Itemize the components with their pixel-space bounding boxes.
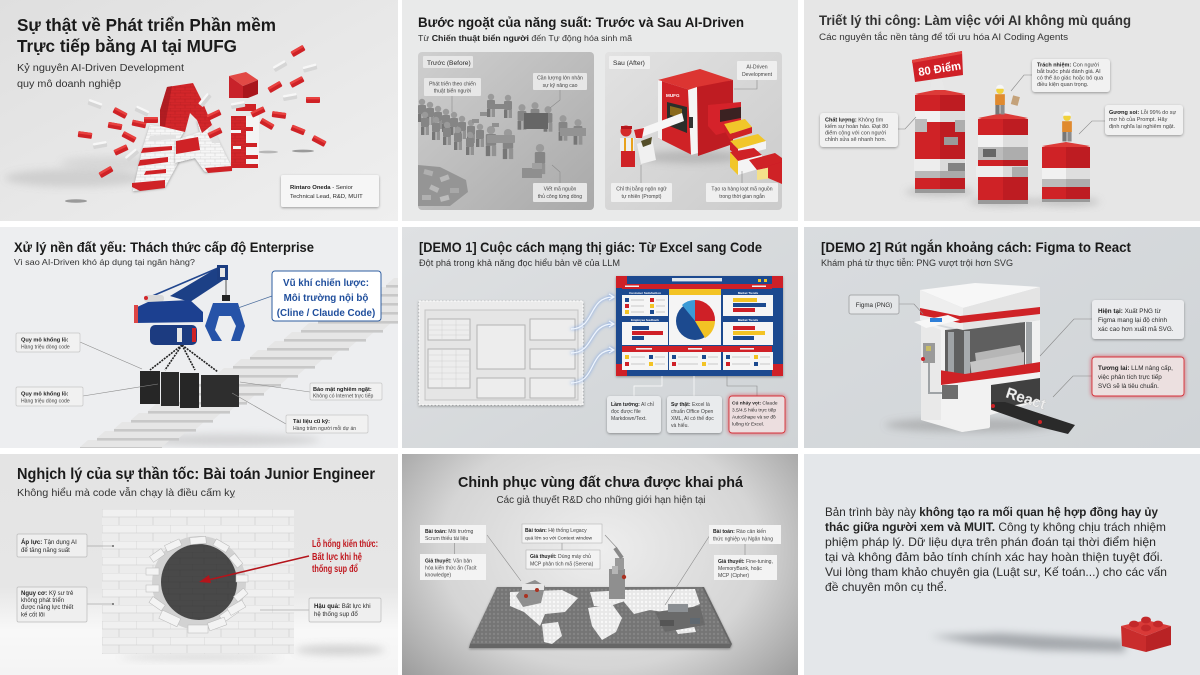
callout: future highlighted: SVG sẽ là tiêu chuẩn. xyxy=(1098,382,1159,390)
card: author credit: Rintaro Oneda - Senior xyxy=(290,185,353,191)
text block: disclaimer: phiệm pháp lý. Dữ liệu dựa trên phán đoán tại thời điểm hiện xyxy=(825,536,1156,549)
panel: demo 1 excel to code xyxy=(402,227,798,448)
callout: AI-Driven Development xyxy=(734,61,777,89)
callout group: scrum documentation: Bài toán: Môi trường xyxy=(425,529,474,535)
callout: risk: kế cốt lõi xyxy=(21,612,45,618)
callout: myth: Markdown/Text. xyxy=(611,416,647,422)
text block: disclaimer: Bản trình bày này không tạo ra mối quan hệ hợp đồng hay ủy xyxy=(825,506,1159,519)
callout: future highlighted: việc phân tích trực tiếp xyxy=(1098,372,1162,381)
callout: knowledge gap xyxy=(312,537,378,575)
illustration: red code machine with prompt operator xyxy=(620,69,782,184)
callout: truth: và hiểu. xyxy=(671,422,689,429)
callout: quality xyxy=(820,113,916,147)
text block: subtitle: Từ Chiến thuật biển người đến Tự động hóa sinh mã xyxy=(418,33,632,43)
illustration: generated dashboard: Market Trends xyxy=(738,318,759,322)
text block: subtitle: Kỷ nguyên AI-Driven Development xyxy=(17,62,184,74)
illustration: white brick press machine xyxy=(885,283,1075,434)
callout: truth: chuẩn Office Open xyxy=(671,408,714,415)
callout: human wave tactic xyxy=(424,78,481,112)
illustration: grey minifigure crowd and loose bricks xyxy=(418,94,586,206)
callout: myth xyxy=(607,376,662,433)
callout: consequence: hệ thống sụp đổ xyxy=(314,611,358,618)
callout: manual coding xyxy=(533,165,587,202)
callout: quality: điểm cộng với con người xyxy=(825,130,886,136)
text block: disclaimer xyxy=(825,506,1167,594)
callout: many low skilled people xyxy=(533,73,587,108)
callout: figma png xyxy=(849,295,923,314)
text block: disclaimer: đề chuyên môn cụ thể. xyxy=(825,581,947,594)
illustration: single red brick with shadow xyxy=(930,617,1171,652)
callout: responsibility xyxy=(1011,59,1110,92)
illustration: generated dashboard: Customer Satisfaction xyxy=(629,291,661,295)
text block: subtitle: quy mô doanh nghiệp xyxy=(17,78,121,90)
text block: subtitle: Khám phá từ thực tiễn: PNG vượt trội hơn SVG xyxy=(821,258,1013,268)
callout: old documentation xyxy=(232,393,368,433)
callout: risk xyxy=(17,587,114,622)
callout: myth: Lầm tưởng: AI chỉ xyxy=(611,401,655,408)
callout group: banking domain knowledge: thức nghiệp vụ Ngân hàng xyxy=(713,536,773,542)
callout: human wave tactic: thuật biển người xyxy=(434,88,471,94)
callout: quantum leap highlighted: AutoShape và sơ đồ xyxy=(732,414,776,420)
callout group: legacy system: Giả thuyết: Dùng máy chủ xyxy=(530,553,591,560)
illustration: tower one with 80 point sign xyxy=(905,74,975,196)
callout: old documentation: Hàng trăm người mỗi dự án xyxy=(293,425,356,432)
callout: manual coding: thủ công từng dòng xyxy=(538,193,582,200)
callout group: scrum documentation: Scrum thiếu tài liệu xyxy=(425,536,468,542)
illustration: tower two with reviewer figure xyxy=(969,85,1037,206)
illustration: white brick wall with hole xyxy=(102,509,385,660)
label: after: Sau (After) xyxy=(613,60,645,67)
callout group: banking domain knowledge: MCP (Cipher) xyxy=(718,573,749,579)
callout: massive scale upper: Quy mô khổng lồ: xyxy=(21,336,69,344)
callout: strict security: Bảo mật nghiêm ngặt: xyxy=(313,387,372,393)
callout group: banking domain knowledge: Giả thuyết: Fine-tuning, xyxy=(718,558,773,565)
callout: mass code output xyxy=(706,171,778,202)
callout: figma png: Figma (PNG) xyxy=(856,302,892,309)
callout group: banking domain knowledge: MemoryBank, hoặc xyxy=(718,566,762,572)
arrow: to knowledge gap xyxy=(199,556,309,583)
callout: mass code output: Tạo ra hàng loạt mã nguồn xyxy=(711,186,773,192)
panel: conquering unexplored land xyxy=(402,454,798,675)
callout: responsibility: điều kiện quan trọng. xyxy=(1037,82,1089,88)
callout: AI-Driven Development: AI-Driven xyxy=(746,64,768,70)
arrows: glowing links from sheet to dashboard xyxy=(571,294,614,383)
panel: before and after xyxy=(402,0,798,221)
callout: risk: không phát triển xyxy=(21,597,64,604)
callout: present xyxy=(1040,300,1184,356)
callout: AI-Driven Development: Development xyxy=(742,72,773,78)
heading: unexplored land: Chinh phục vùng đất chưa được khai phá xyxy=(458,474,744,491)
callout: knowledge gap: Bất lực khi hệ xyxy=(312,551,362,563)
callout: massive scale upper: Hàng triệu dòng code xyxy=(21,344,70,350)
callout: natural language prompt xyxy=(611,165,672,202)
illustration: brick world map with towers xyxy=(469,548,732,648)
label: before xyxy=(423,56,473,68)
callout: old documentation: Tài liệu cũ kỹ: xyxy=(293,419,330,425)
callout: present: xác cao hơn xuất mã SVG. xyxy=(1098,324,1174,333)
callout: manual coding: Viết mã nguồn xyxy=(544,186,577,192)
callout group: legacy system: Bài toán: Hệ thống Legacy xyxy=(525,528,587,534)
callout: responsibility: Trách nhiệm: Con người xyxy=(1037,62,1099,68)
text block: subtitle: Đột phá trong khả năng đọc hiểu bản vẽ của LLM xyxy=(419,258,620,268)
label: before: Trước (Before) xyxy=(427,60,471,67)
callout: many low skilled people: sự kỹ năng cao xyxy=(543,83,578,89)
panel: demo 2 figma to react xyxy=(804,227,1200,448)
panel: working philosophy xyxy=(804,0,1200,221)
card: author credit xyxy=(281,175,379,207)
illustration: generated dashboard: Market Trends xyxy=(738,291,759,295)
illustration: red code machine with prompt operator: MUFG xyxy=(666,93,680,98)
callout group: banking domain knowledge: Bài toán: Rào cản kiến xyxy=(713,529,766,535)
heading: construction philosophy: Triết lý thi công: Làm việc với AI không mù quáng xyxy=(819,13,1131,28)
callout group: scrum documentation: Giả thuyết: Văn bản xyxy=(425,558,472,564)
heading: slide title: Trực tiếp bằng AI tại MUFG xyxy=(17,35,237,56)
panel: legal disclaimer xyxy=(804,454,1200,675)
callout: pressure: Áp lực: Tận dụng AI xyxy=(21,539,77,546)
callout: consequence: Hậu quả: Bất lực khi xyxy=(314,603,371,610)
callout: massive scale lower: Quy mô khổng lồ: xyxy=(21,390,69,398)
callout: mirror: Gương soi: Lỗi 99% do sự xyxy=(1109,109,1177,116)
heading: soft ground: Xử lý nền đất yếu: Thách thức cấp độ Enterprise xyxy=(14,239,314,255)
illustration: white brick staircase xyxy=(80,278,476,450)
heading: slide title xyxy=(17,15,276,56)
illustration: generated dashboard: Employee feedback xyxy=(631,318,659,322)
text block: subtitle: Không hiểu mà code vẫn chạy là điều cấm kỵ xyxy=(17,486,236,499)
callout: natural language prompt: tự nhiên (Prompt) xyxy=(622,194,662,200)
callout group: legacy system: MCP phân tích mã (Serena) xyxy=(530,562,594,568)
card: author credit: Technical Lead, R&D, MUIT xyxy=(290,194,363,200)
illustration: brick AI letters with flying bricks xyxy=(5,45,327,203)
heading: visual revolution: [DEMO 1] Cuộc cách mạng thị giác: Từ Excel sang Code xyxy=(419,239,762,255)
callout: responsibility: bắt buộc phải đánh giá. AI xyxy=(1037,68,1101,75)
text block: subtitle xyxy=(17,62,184,90)
callout: myth: đọc được file xyxy=(611,409,641,415)
callout: pressure: để tăng năng suất xyxy=(21,547,70,554)
callout: massive scale lower xyxy=(16,384,158,406)
callout: quality: kiếm sự hoàn hảo. Đạt 80 xyxy=(825,124,888,130)
callout: knowledge gap: thống sụp đổ xyxy=(312,563,358,575)
callout: present: Figma mang lại độ chính xyxy=(1098,317,1167,324)
callout: human wave tactic: Phát triển theo chiến xyxy=(429,80,476,88)
callout: future highlighted: Tương lai: LLM nâng cấp, xyxy=(1098,363,1173,372)
callout: truth xyxy=(667,376,722,433)
callout: truth: Sự thật: Excel là xyxy=(671,402,710,408)
text block: disclaimer: thác giữa người xem và MUIT. Công ty không chịu trách nhiệm xyxy=(825,521,1166,534)
callout: strategic weapon: Vũ khí chiến lược: xyxy=(283,278,369,289)
callout group: banking domain knowledge xyxy=(665,525,781,605)
illustration: white brick press machine: React xyxy=(1004,385,1048,413)
sign: 80 Điểm: 80 Điểm xyxy=(918,60,962,79)
callout: present: Hiện tại: Xuất PNG từ xyxy=(1098,306,1161,315)
callout: many low skilled people: Cần lượng lớn nhân xyxy=(537,76,583,82)
callout group: scrum documentation: hóa kiến thức ẩn (Tacit xyxy=(425,564,477,572)
callout: quantum leap highlighted: luồng từ Excel. xyxy=(732,422,764,428)
panel: enterprise challenge xyxy=(0,227,398,448)
callout: consequence xyxy=(260,598,381,622)
callout: mass code output: trong thời gian ngắn xyxy=(719,193,765,200)
callout: massive scale upper xyxy=(16,333,142,369)
callout: quantum leap highlighted: Cú nhảy vọt: Claude xyxy=(732,400,778,406)
panel: junior engineer paradox xyxy=(0,454,398,675)
label: after xyxy=(609,56,650,69)
callout: natural language prompt: Chỉ thị bằng ngôn ngữ xyxy=(616,186,667,192)
illustration: tower three with figure xyxy=(1032,112,1100,206)
panel: title slide xyxy=(0,0,398,221)
panel: after xyxy=(605,52,782,210)
callout: quantum leap highlighted: 3.5/4.5 hiểu trực tiếp xyxy=(732,406,776,414)
callout: responsibility: có thể ảo giác hoặc bỏ qua xyxy=(1037,74,1104,82)
callout: quality: Chất lượng: Không tìm xyxy=(825,116,884,124)
callout: strategic weapon: Môi trường nội bộ xyxy=(284,293,368,304)
heading: turning point of productivity: Bước ngoặt của năng suất: Trước và Sau AI-Driven xyxy=(418,14,744,30)
sign: 80 Điểm xyxy=(912,51,963,82)
text block: subtitle: Vì sao AI-Driven khó áp dụng tại ngân hàng? xyxy=(14,257,195,267)
callout: quantum leap highlighted xyxy=(727,376,785,433)
text block: subtitle: Các giả thuyết R&D cho những giới hạn hiện tại xyxy=(496,494,706,506)
text block: disclaimer: Vui lòng tham khảo chuyên gia (Luật sư, Kế toán...) cho các vấn xyxy=(825,566,1167,579)
heading: figma to react: [DEMO 2] Rút ngắn khoảng cách: Figma to React xyxy=(821,238,1131,255)
callout: risk: được năng lực thiết xyxy=(21,605,74,611)
illustration: blue brick crane lifting black blocks xyxy=(134,265,245,408)
callout: mirror: mơ hồ của Prompt. Hãy xyxy=(1109,116,1168,123)
illustration: generated dashboard xyxy=(616,276,783,376)
text block: subtitle: Các nguyên tắc nền tảng để tối ưu hóa AI Coding Agents xyxy=(819,32,1068,42)
callout: massive scale lower: Hàng triệu dòng code xyxy=(21,398,70,404)
callout group: legacy system xyxy=(522,524,617,569)
callout: strategic weapon xyxy=(238,271,381,321)
heading: slide title: Sự thật về Phát triển Phần mềm xyxy=(17,15,276,35)
callout group: legacy system: quá lớn so với Context window xyxy=(525,536,593,542)
text block: disclaimer: tại và không đảm bảo tính chính xác hay hoàn thiện tuyệt đối. xyxy=(825,551,1163,564)
callout: future highlighted xyxy=(1053,357,1184,397)
callout: mirror: định nghĩa lại nghiêm ngặt. xyxy=(1109,124,1176,130)
heading: speed paradox: Nghịch lý của sự thần tốc: Bài toán Junior Engineer xyxy=(17,466,375,483)
callout group: scrum documentation xyxy=(420,525,521,581)
callout: risk: Nguy cơ: Kỹ sư trẻ xyxy=(21,591,74,597)
callout: strategic weapon: (Cline / Claude Code) xyxy=(277,308,375,319)
callout: quality: chỉnh sửa sẽ nhanh hơn. xyxy=(825,136,887,143)
callout: truth: XML, AI có thể đọc xyxy=(671,415,714,422)
callout: strict security xyxy=(240,382,382,400)
callout: strict security: Không có Internet trực tiếp xyxy=(313,394,373,400)
callout: pressure xyxy=(17,534,114,557)
callout group: scrum documentation: knowledge) xyxy=(425,572,451,578)
panel: before xyxy=(418,52,594,210)
callout: mirror xyxy=(1079,105,1183,135)
illustration: white relief excel sheet xyxy=(419,301,583,405)
